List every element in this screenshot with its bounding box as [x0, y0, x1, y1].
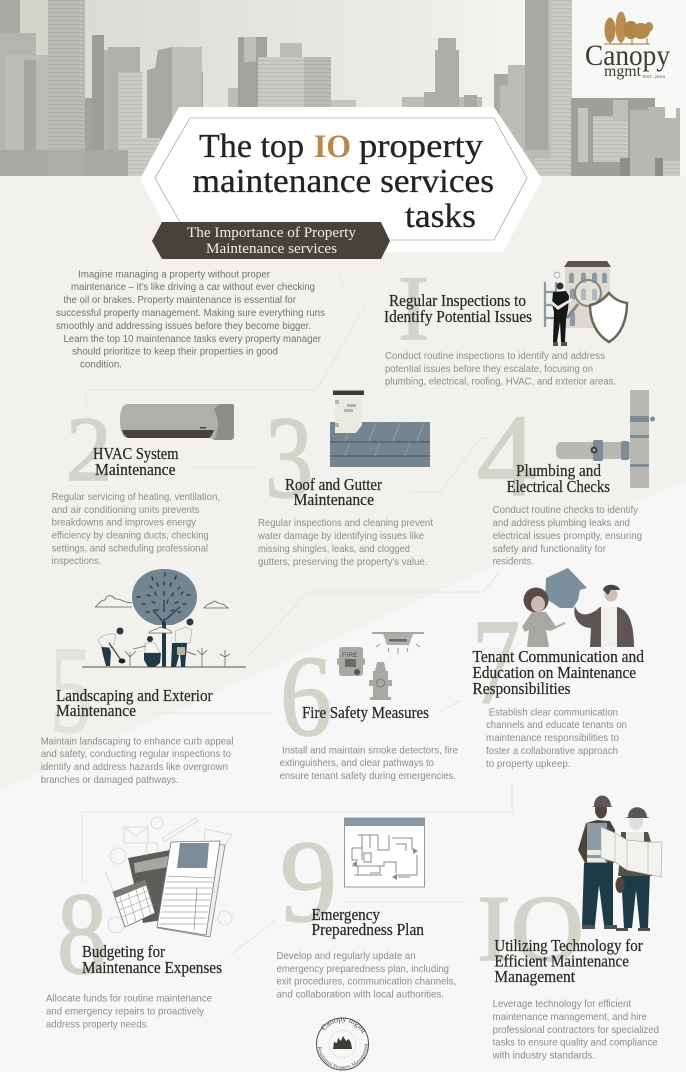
heading: Plumbing and — [516, 461, 602, 480]
heading: Identify Potential Issues — [384, 307, 532, 326]
heading: Tenant Communication and — [472, 647, 645, 666]
icon: smoke detector, alarm, hydrant: FIRE — [342, 652, 359, 659]
description: exit procedures, communication channels, — [276, 976, 456, 988]
description: Develop and regularly update an — [276, 950, 416, 962]
heading — [312, 905, 424, 939]
logo: Canopy mgmt — [585, 12, 670, 80]
number 3: 3 — [265, 392, 313, 523]
connector lines — [82, 305, 512, 955]
city skyline header — [0, 0, 686, 176]
number 5: 5 — [50, 622, 92, 760]
intro text: should prioritize to keep their properties in good — [72, 346, 278, 358]
number 9: 9 — [280, 816, 337, 947]
description: and collaboration with local authorities. — [276, 988, 444, 1000]
icon: roof and chimney — [330, 390, 430, 467]
intro text: condition. — [80, 358, 122, 370]
description: plumbing, electrical, roofing, HVAC, and exterior areas. — [385, 376, 616, 388]
seal: Canopy mgmt badge — [316, 1018, 369, 1070]
number 10: IO — [477, 877, 584, 981]
heading — [494, 936, 643, 986]
heading: Management — [494, 967, 575, 986]
description: ensure tenant safety during emergencies. — [280, 770, 456, 782]
heading: HVAC System — [93, 444, 179, 463]
icon: inspector, building and shield — [545, 261, 627, 346]
description: efficiency by cleaning ducts, checking — [52, 530, 209, 542]
description: Regular inspections and cleaning prevent — [258, 517, 433, 529]
description: Conduct routine inspections to identify and address — [385, 350, 605, 362]
title hexagon — [140, 107, 542, 252]
heading: Maintenance — [95, 460, 176, 479]
title: tasks — [405, 198, 476, 235]
icon: evacuation floor plan — [344, 818, 424, 887]
description: and address plumbing leaks and — [493, 517, 630, 529]
description: branches or damaged pathways. — [41, 774, 179, 786]
description: inspections. — [52, 555, 102, 567]
step 3: Roof and Gutter — [257, 390, 433, 568]
intro text — [56, 268, 325, 370]
description — [41, 736, 234, 786]
seal: Canopy mgmt badge: Residential Property Management — [318, 1044, 368, 1070]
heading — [82, 942, 222, 977]
description: gutters, preserving the property's value. — [258, 556, 428, 568]
description: safety and functionality for — [493, 543, 606, 555]
number 8: 8 — [57, 868, 107, 999]
title: maintenance services — [192, 163, 494, 200]
description: extinguishers, and clear pathways to — [280, 757, 434, 769]
heading — [507, 461, 610, 496]
heading: Budgeting for — [82, 942, 165, 961]
heading: Landscaping and Exterior — [56, 686, 213, 705]
step 2: HVAC — [52, 398, 234, 567]
intro text: maintenance – it's like driving a car without ever checking — [71, 281, 315, 293]
description — [486, 706, 627, 770]
intro text: the oil or brakes. Property maintenance is essential for — [64, 294, 296, 306]
heading — [472, 647, 645, 698]
description: emergency preparedness plan, including — [276, 963, 449, 975]
heading: Maintenance Expenses — [82, 958, 222, 977]
description — [493, 504, 642, 568]
heading: Maintenance — [294, 490, 374, 509]
description: breakdowns and improves energy — [52, 516, 197, 528]
heading — [56, 686, 213, 720]
heading: Fire Safety Measures — [302, 703, 429, 722]
description: potential issues before they escalate, focusing on — [385, 363, 593, 375]
description — [280, 744, 458, 782]
intro panel outline — [30, 242, 350, 380]
description: and air conditioning units prevents — [52, 504, 199, 516]
number 6: 6 — [280, 633, 332, 760]
heading: Responsibilities — [472, 679, 570, 698]
icon: air conditioner — [120, 404, 234, 440]
description: Leverage technology for efficient — [493, 998, 631, 1010]
description: maintenance management, and hire — [493, 1011, 647, 1023]
heading: Emergency — [312, 905, 381, 924]
heading: Electrical Checks — [507, 477, 610, 496]
description — [385, 350, 616, 388]
icon: pipes — [556, 390, 655, 488]
description: and emergency repairs to proactively — [46, 1006, 205, 1018]
icon: calculator, calendar, paperwork — [106, 817, 232, 937]
description: electrical issues promptly, ensuring — [493, 530, 642, 542]
description: Conduct routine checks to identify — [493, 504, 639, 516]
heading: Education on Maintenance — [472, 663, 636, 682]
heading: Utilizing Technology for — [494, 936, 643, 955]
description: water damage by identifying issues like — [257, 530, 424, 542]
heading — [93, 444, 179, 479]
description — [257, 517, 433, 568]
title: property — [359, 128, 483, 165]
logo: Canopy mgmt: Canopy — [585, 39, 670, 72]
description: and safety, conducting regular inspections to — [41, 748, 231, 760]
description: residents. — [493, 556, 534, 568]
description: missing shingles, leaks, and clogged — [258, 543, 410, 555]
number 4: 4 — [477, 390, 536, 521]
description: maintenance responsibilities to — [486, 732, 619, 744]
banner: The Importance of Property Maintenance services: Maintenance services — [206, 241, 337, 257]
description: with industry standards. — [492, 1050, 595, 1062]
description: to property upkeep. — [486, 758, 570, 770]
title: IO — [314, 129, 351, 165]
description: foster a collaborative approach — [486, 745, 618, 757]
logo: Canopy mgmt: EST. 2019 — [643, 74, 666, 79]
step 7: Tenant Communication — [472, 568, 645, 770]
icon: tenant and manager with house — [522, 568, 634, 647]
heading: Roof and Gutter — [285, 475, 382, 494]
description: Establish clear communication — [489, 706, 618, 718]
description: identify and address hazards like overgrown — [41, 761, 228, 773]
step 6: Fire Safety — [280, 633, 458, 782]
step 8: Budgeting — [46, 817, 232, 1030]
description: tasks to ensure quality and compliance — [493, 1036, 658, 1048]
icon: two workers with blueprint — [578, 796, 662, 931]
icon: smoke detector, alarm, hydrant — [337, 633, 424, 700]
banner: The Importance of Property Maintenance services: The Importance of Property — [187, 225, 356, 241]
heading: Regular Inspections to — [389, 291, 526, 310]
intro text: Imagine managing a property without proper — [78, 268, 270, 280]
description — [276, 950, 456, 1000]
banner: The Importance of Property Maintenance services — [152, 222, 390, 259]
description: channels and educate tenants on — [486, 719, 627, 731]
description: professional contractors for specialized — [493, 1024, 659, 1036]
heading: Maintenance — [56, 701, 136, 720]
number 2: 2 — [66, 398, 112, 500]
description: Maintain landscaping to enhance curb appeal — [41, 736, 234, 748]
description — [52, 491, 220, 567]
step 10: Utilizing Technology — [477, 796, 662, 1062]
step 1: Regular Inspections — [384, 257, 627, 388]
heading: Preparedness Plan — [312, 920, 424, 939]
heading — [285, 475, 382, 509]
description — [46, 992, 212, 1030]
step 5: Landscaping — [41, 569, 246, 786]
number 7: 7 — [472, 595, 520, 730]
intro text: Learn the top 10 maintenance tasks every property manager — [64, 333, 321, 345]
intro text: smoothly and addressing issues before they become bigger. — [56, 320, 311, 332]
description — [492, 998, 659, 1062]
icon: gardeners and tree — [82, 569, 246, 667]
description: Allocate funds for routine maintenance — [46, 992, 212, 1004]
intro text: successful property management. Making sure everything runs — [56, 307, 325, 319]
heading — [384, 291, 532, 326]
description: Install and maintain smoke detectors, fire — [282, 744, 458, 756]
step 9: Emergency Preparedness — [276, 816, 456, 1000]
title: The top — [199, 128, 304, 165]
number 1: I — [398, 257, 429, 359]
step 4: Plumbing and Electrical — [477, 390, 655, 568]
description: settings, and scheduling professional — [52, 542, 208, 554]
description: address property needs. — [46, 1018, 149, 1030]
description: Regular servicing of heating, ventilation, — [52, 491, 220, 503]
heading: Efficient Maintenance — [494, 952, 629, 970]
logo: Canopy mgmt: mgmt — [604, 63, 642, 80]
title — [192, 128, 494, 235]
seal: Canopy mgmt badge: Canopy mgmt — [321, 1018, 366, 1034]
